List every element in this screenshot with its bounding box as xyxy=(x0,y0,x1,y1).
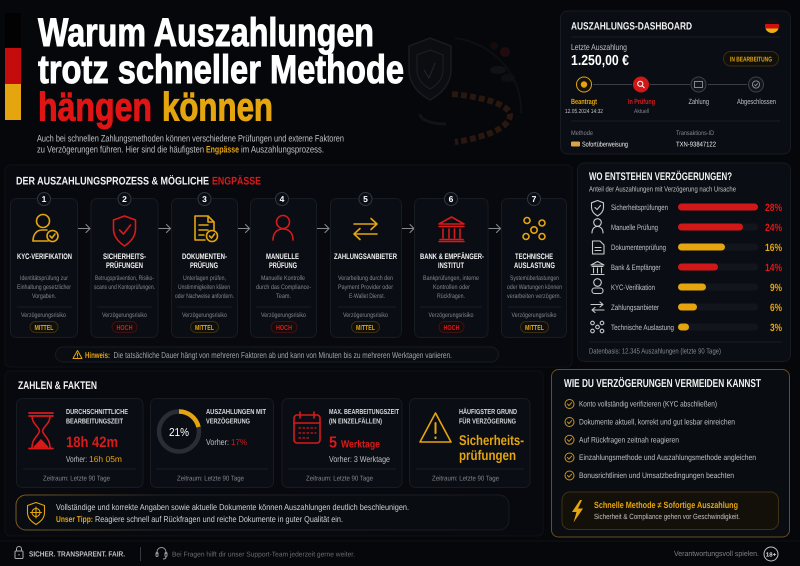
card: max time: MAX. BEARBEITUNGSZEIT xyxy=(329,407,399,416)
checklist: Einzahlungsmethode und Auszahlungsmethode angleichen xyxy=(579,453,756,462)
step 4: Manuelle Prüfung: durch das Compliance- xyxy=(256,284,311,291)
bar chart: 28% xyxy=(765,202,783,214)
step 4: Manuelle Prüfung: Manuelle Kontrolle xyxy=(261,275,305,282)
stepper: Abgeschlossen xyxy=(737,97,776,106)
bar chart: 16% xyxy=(765,242,783,254)
step 5: Zahlungsanbieter: MITTEL xyxy=(356,323,375,332)
icon: lock xyxy=(15,546,23,558)
chart title: WO ENTSTEHEN VERZÖGERUNGEN? xyxy=(589,170,732,183)
step 6: Bank: 6 xyxy=(449,194,454,204)
step 6: Bank: Bankprüfungen, interne xyxy=(423,275,479,282)
icon: shield check xyxy=(114,216,136,246)
background illustration: shield and roulette wheel xyxy=(409,38,521,142)
stepper: 12.05.2024 14:32 xyxy=(565,108,604,115)
step 4: Manuelle Prüfung: PRÜFUNG xyxy=(269,261,297,270)
facts heading: ZAHLEN & FAKTEN xyxy=(18,380,97,392)
bar chart: Manuelle Prüfung xyxy=(611,223,658,232)
step 3: Dokumente: MITTEL xyxy=(195,323,214,332)
intro text: zu Verzögerungen führen. Hier sind die häufigsten xyxy=(37,144,204,156)
icon: shield xyxy=(28,502,44,524)
step 4: Manuelle Prüfung: Verzögerungsrisiko xyxy=(261,312,306,319)
status badge xyxy=(724,52,778,66)
panel: process xyxy=(5,165,572,367)
step 1: KYC: Identitätsprüfung zur xyxy=(20,275,69,282)
intro text xyxy=(37,134,344,156)
note: Hinweis: Hinweis: xyxy=(85,350,110,360)
step 5: Zahlungsanbieter: Verzögerungsrisiko xyxy=(343,312,388,319)
bar chart: 24% xyxy=(765,222,783,234)
card: top reason: Sicherheits- xyxy=(459,432,524,448)
step 1: KYC xyxy=(10,192,78,338)
step 2: Sicherheit: HOCH xyxy=(116,323,132,332)
card: max time: Vorher: 3 Werktage xyxy=(329,454,390,464)
icon: warning triangle xyxy=(420,413,451,442)
step 6: Bank: Kontrollen oder xyxy=(433,284,471,291)
card: delayed share: Zeitraum: Letzte 90 Tage xyxy=(177,474,244,482)
step 7: Technische Auslastung: Systemüberlastungen xyxy=(510,275,559,282)
step 6: Bank: HOCH xyxy=(444,323,460,332)
card: average time xyxy=(16,398,143,488)
status badge: IN BEARBEITUNG xyxy=(730,56,772,63)
ring chart: 21% xyxy=(169,427,189,439)
payment details: TXN-93847122 xyxy=(676,142,716,148)
card: average time: 18h 42m xyxy=(66,434,118,451)
title: hängen xyxy=(38,86,152,130)
checklist: Bonusrichtlinien und Umsatzbedingungen beachten xyxy=(579,471,734,480)
title: können xyxy=(162,86,273,130)
step 1: KYC: Einhaltung gesetzlicher xyxy=(17,284,72,291)
step 7: Technische Auslastung: oder Wartungen können xyxy=(507,284,562,291)
step 6: Bank: Rückfragen. xyxy=(437,293,465,300)
step 2: Sicherheit: Verzögerungsrisiko xyxy=(102,312,147,319)
step 4: Manuelle Prüfung: Team. xyxy=(276,293,291,300)
note: Hinweis xyxy=(56,347,498,362)
card: top reason xyxy=(410,398,530,488)
bar chart: 6% xyxy=(770,302,783,314)
step 4: Manuelle Prüfung: MANUELLE xyxy=(266,252,299,261)
step 7: Technische Auslastung: 7 xyxy=(532,194,537,204)
step 3: Dokumente: Verzögerungsrisiko xyxy=(182,312,227,319)
step 1: KYC: Vorgaben. xyxy=(32,293,56,300)
icon: bank xyxy=(439,217,464,242)
step 6: Bank xyxy=(414,192,488,338)
card: average time: BEARBEITUNGSZEIT xyxy=(66,416,123,426)
step 7: Technische Auslastung: AUSLASTUNG xyxy=(514,261,555,270)
card: max time xyxy=(282,398,402,488)
step 7: Technische Auslastung: Verzögerungsrisiko xyxy=(512,312,557,319)
stepper: In Prüfung xyxy=(628,97,655,106)
arrows between steps xyxy=(78,224,500,232)
last payout: Letzte Auszahlung xyxy=(571,42,627,52)
footer: Bei Fragen hilft dir unser Support-Team jederzeit gerne weiter. xyxy=(172,550,355,558)
process heading: DER AUSZAHLUNGSPROZESS & MÖGLICHE xyxy=(16,174,209,188)
icon: document check xyxy=(195,216,218,242)
icon: 18+ xyxy=(764,547,778,561)
step 2: Sicherheit: PRÜFUNGEN xyxy=(106,261,143,270)
intro text: Auch bei schnellen Zahlungsmethoden können verschiedene Prüfungen und externe Faktoren xyxy=(37,134,344,144)
step 6: Bank: BANK & EMPFÄNGER- xyxy=(420,252,484,261)
title: Warum Auszahlungen xyxy=(38,11,374,55)
tip banner xyxy=(16,495,509,530)
step 1: KYC: KYC-VERIFIKATION xyxy=(17,252,72,261)
icon: user check xyxy=(33,214,58,242)
step 3: Dokumente: DOKUMENTEN- xyxy=(182,252,227,261)
card: average time: Vorher: xyxy=(66,454,87,464)
step 5: Zahlungsanbieter xyxy=(330,192,402,338)
title: trotz schneller Methode xyxy=(38,48,404,92)
card: delayed share: 17% xyxy=(231,437,247,447)
header xyxy=(5,11,521,156)
step 3: Dokumente xyxy=(172,192,238,338)
step 2: Sicherheit: 2 xyxy=(122,194,127,204)
step 7: Technische Auslastung xyxy=(502,192,566,338)
bar chart: Zahlungsanbieter xyxy=(611,303,659,312)
bar chart: KYC-Verifikation xyxy=(611,283,655,292)
card: average time: DURCHSCHNITTLICHE xyxy=(66,407,128,416)
icon: nodes xyxy=(523,218,545,240)
stepper: Zahlung xyxy=(688,97,709,106)
payment details: Sofortüberweisung xyxy=(582,140,628,148)
step 5: Zahlungsanbieter: 5 xyxy=(363,194,368,204)
checklist: Dokumente aktuell, korrekt und gut lesbar einreichen xyxy=(579,418,735,426)
flag bar xyxy=(5,13,21,120)
step 7: Technische Auslastung: TECHNISCHE xyxy=(515,252,553,261)
step 3: Dokumente: Unstimmigkeiten klären xyxy=(178,284,230,291)
payment details xyxy=(571,130,716,148)
icon: headset xyxy=(156,548,167,559)
step 1: KYC: Verzögerungsrisiko xyxy=(21,312,66,319)
checklist: Konto vollständig verifizieren (KYC abschließen) xyxy=(579,400,717,408)
callout: Schnelle Methode ≠ Sofortige Auszahlung xyxy=(594,500,738,510)
card: average time: Zeitraum: Letzte 90 Tage xyxy=(43,474,110,482)
step 5: Zahlungsanbieter: Verarbeitung durch den xyxy=(338,275,393,282)
step 2: Sicherheit: SICHERHEITS- xyxy=(103,252,146,261)
icon: calendar xyxy=(294,412,320,443)
card: delayed share: Vorher: xyxy=(206,437,229,447)
footer xyxy=(0,541,800,561)
step 5: Zahlungsanbieter: Payment Provider oder xyxy=(338,284,394,291)
last payout: 1.250,00 € xyxy=(571,53,629,69)
step 5: Zahlungsanbieter: E-Wallet Dienst. xyxy=(349,293,385,300)
data basis: Datenbasis: 12.345 Auszahlungen (letzte 90 Tage) xyxy=(589,346,721,356)
step 7: Technische Auslastung: MITTEL xyxy=(525,323,544,332)
chart subtitle: Anteil der Auszahlungen mit Verzögerung nach Ursache xyxy=(589,184,736,194)
card: delayed share: VERZÖGERUNG xyxy=(206,416,250,426)
stepper: Aktuell xyxy=(634,108,649,115)
chart icons xyxy=(591,200,604,333)
step 1: KYC: 1 xyxy=(42,194,47,204)
icon: transfer arrows xyxy=(354,218,377,240)
process heading: ENGPÄSSE xyxy=(212,174,261,188)
step 3: Dokumente: oder Nachweise anfordern. xyxy=(175,293,234,300)
panel: delay causes xyxy=(578,163,790,362)
step 2: Sicherheit: Betrugsprävention, Risiko- xyxy=(95,275,154,282)
callout: Sicherheit & Compliance gehen vor Geschwindigkeit. xyxy=(594,512,740,521)
card: delayed share: AUSZAHLUNGEN MIT xyxy=(206,407,266,416)
tip banner: Unser Tipp: xyxy=(56,514,93,524)
footer: Verantwortungsvoll spielen. xyxy=(674,549,759,558)
intro text: Engpässe xyxy=(206,144,239,156)
bar chart: Dokumentenprüfung xyxy=(611,243,666,252)
step 6: Bank: Verzögerungsrisiko xyxy=(428,312,474,319)
icon: bolt xyxy=(572,500,583,522)
card: max time: 5 xyxy=(329,434,337,452)
card: average time: 16h 05m xyxy=(89,454,122,464)
bar chart: Sicherheitsprüfungen xyxy=(611,203,668,212)
card: max time: Werktage xyxy=(341,438,380,450)
checklist xyxy=(565,400,756,480)
icon: 18+: 18+ xyxy=(766,551,777,558)
icon: person xyxy=(273,216,293,240)
panel: avoid delays xyxy=(552,370,790,537)
panel: facts xyxy=(5,371,543,536)
card: top reason: HÄUFIGSTER GRUND xyxy=(459,407,517,416)
stepper: Beantragt xyxy=(571,97,597,106)
footer: SICHER. TRANSPARENT. FAIR. xyxy=(29,550,125,558)
step 4: Manuelle Prüfung: HOCH xyxy=(276,323,292,332)
bar chart: Technische Auslastung xyxy=(611,323,674,332)
card: max time: Zeitraum: Letzte 90 Tage xyxy=(306,474,373,482)
bar chart xyxy=(591,200,783,334)
step 4: Manuelle Prüfung: 4 xyxy=(280,194,285,204)
title xyxy=(38,11,404,130)
step 7: Technische Auslastung: verarbeiten verzögern. xyxy=(507,293,561,300)
icon: hourglass xyxy=(29,413,53,448)
step 1: KYC: MITTEL xyxy=(34,323,54,332)
card: delayed share xyxy=(150,398,274,488)
callout xyxy=(562,492,778,530)
card: top reason: Zeitraum: Letzte 90 Tage xyxy=(432,474,499,482)
step 6: Bank: INSTITUT xyxy=(438,261,464,270)
step 3: Dokumente: Unterlagen prüfen, xyxy=(183,275,226,282)
note: Hinweis: Die tatsächliche Dauer hängt von mehreren Faktoren ab und kann von Minuten bis zu mehreren Werktagen variieren. xyxy=(114,350,452,360)
step 5: Zahlungsanbieter: ZAHLUNGSANBIETER xyxy=(334,252,397,261)
step 2: Sicherheit: scans und Kontoprüfungen. xyxy=(94,284,155,291)
card: top reason: FÜR VERZÖGERUNG xyxy=(459,416,516,426)
bar chart: Bank & Empfänger xyxy=(611,263,661,272)
bar chart: 14% xyxy=(765,262,783,274)
step 3: Dokumente: PRÜFUNG xyxy=(190,261,218,270)
panel: dashboard xyxy=(560,11,790,154)
card: top reason: prüfungen xyxy=(459,447,516,463)
checklist: Auf Rückfragen zeitnah reagieren xyxy=(579,435,679,444)
dashboard title: AUSZAHLUNGS-DASHBOARD xyxy=(571,20,692,32)
stepper xyxy=(565,76,776,115)
bar chart: 3% xyxy=(770,322,783,334)
step 3: Dokumente: 3 xyxy=(202,194,207,204)
step 4: Manuelle Prüfung xyxy=(250,192,316,338)
last payout xyxy=(571,42,629,69)
step 2: Sicherheit xyxy=(91,192,158,338)
icon: german flag xyxy=(765,24,779,33)
payment details: Methode xyxy=(571,130,593,137)
bar chart: 9% xyxy=(770,282,783,294)
card: max time: (IN EINZELFÄLLEN) xyxy=(329,416,382,426)
icon: warning xyxy=(73,350,82,358)
payment details: Transaktions-ID xyxy=(676,130,714,137)
tip banner: Reagiere schnell auf Rückfragen und reiche Dokumente in guter Qualität ein. xyxy=(95,514,343,524)
tip banner: Vollständige und korrekte Angaben sowie aktuelle Dokumente können Auszahlungen deutlich beschleunigen. xyxy=(56,502,409,512)
intro text: im Auszahlungsprozess. xyxy=(241,144,324,156)
